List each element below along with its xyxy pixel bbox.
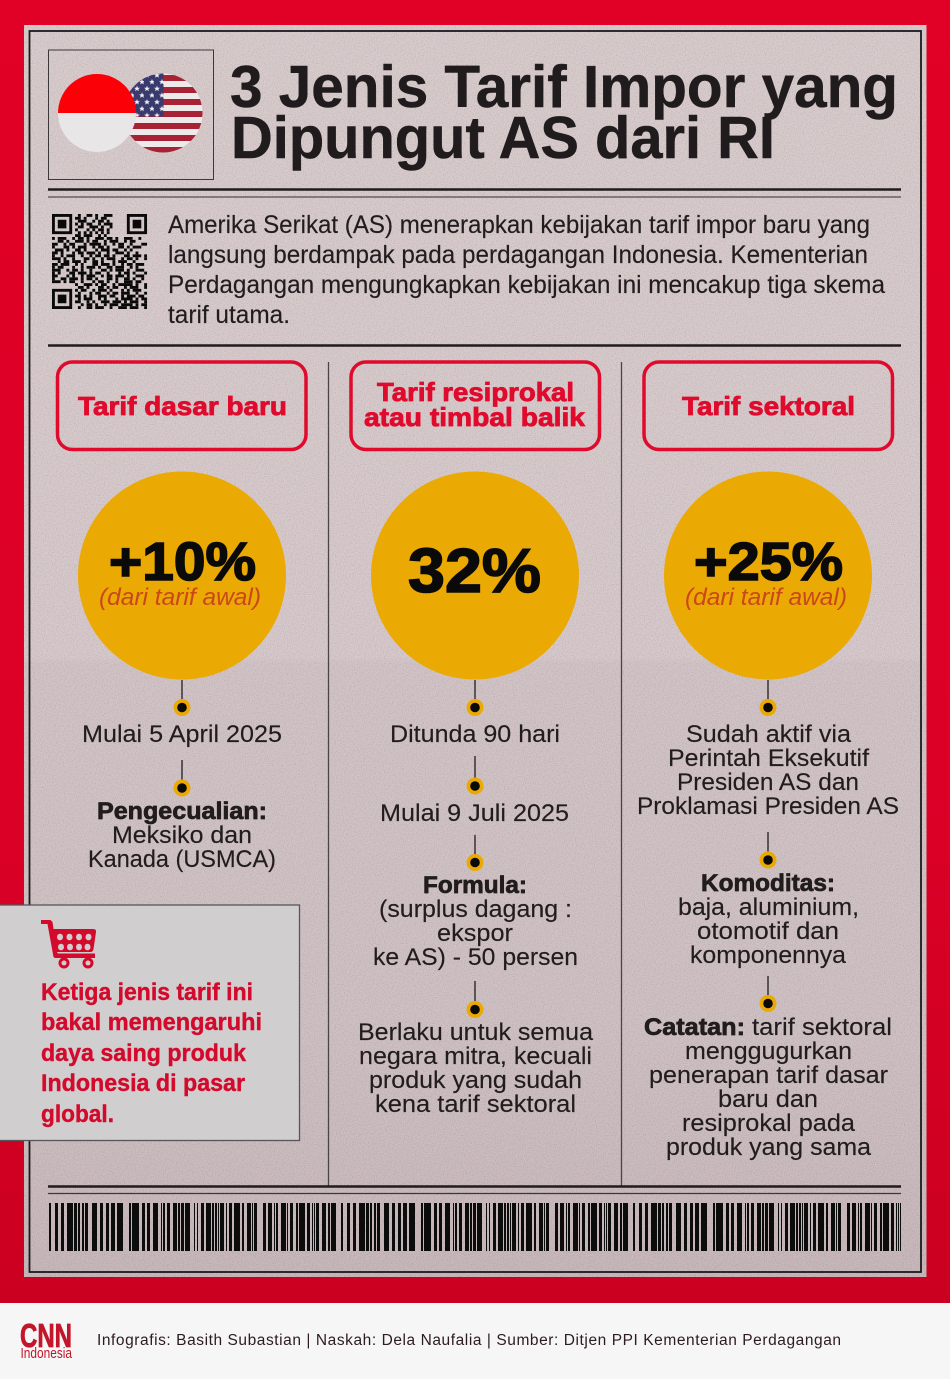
rate circle <box>78 472 286 680</box>
rate circle: (dari tarif awal) <box>685 584 847 611</box>
exceptions: Pengecualian: <box>97 798 267 825</box>
intro text: Perdagangan mengungkapkan kebijakan ini mencakup tiga skema <box>168 271 885 299</box>
exceptions: Meksiko dan <box>112 822 252 849</box>
formula <box>373 872 578 971</box>
rate circle: 32% <box>408 537 541 606</box>
scope note: produk yang sudah <box>369 1067 582 1094</box>
exceptions <box>88 798 276 873</box>
logo: CNN Indonesia: Indonesia <box>20 1346 73 1362</box>
scope note: kena tarif sektoral <box>375 1091 576 1118</box>
scope note: Berlaku untuk semua <box>358 1019 594 1046</box>
icon: Indonesia flag <box>58 74 136 152</box>
icon: US flag <box>123 73 203 153</box>
commodities: baja, aluminium, <box>678 894 859 921</box>
heading box: Tarif resiprokal <box>377 377 574 407</box>
rate circle <box>371 472 579 680</box>
icon: shopping cart <box>41 920 96 967</box>
formula: ke AS) - 50 persen <box>373 944 578 971</box>
flag box <box>48 50 214 180</box>
panel: tarif dasar baru <box>58 362 306 873</box>
heading box: Tarif dasar baru <box>78 391 287 421</box>
intro text: Amerika Serikat (AS) menerapkan kebijakan tarif impor baru yang <box>168 211 870 239</box>
exceptions: Kanada (USMCA) <box>88 846 276 873</box>
heading box: Tarif sektoral <box>682 391 855 421</box>
note: resiprokal pada <box>682 1110 856 1137</box>
intro text <box>168 211 885 329</box>
note: menggugurkan <box>685 1038 852 1065</box>
footer <box>0 1303 950 1379</box>
intro text: langsung berdampak pada perdagangan Indonesia. Kementerian <box>168 241 868 269</box>
note: Catatan: <box>644 1014 745 1041</box>
title: 3 Jenis Tarif Impor yang <box>230 54 898 120</box>
intro text: tarif utama. <box>168 301 290 329</box>
title: Dipungut AS dari RI <box>231 105 775 171</box>
heading box <box>644 362 892 450</box>
rate circle: +25% <box>694 532 843 592</box>
legal basis: Perintah Eksekutif <box>668 745 869 772</box>
connector <box>760 680 776 1012</box>
callout text: Ketiga jenis tarif ini <box>41 979 253 1006</box>
commodities: komponennya <box>690 942 847 969</box>
callout text <box>41 979 262 1128</box>
legal basis: Proklamasi Presiden AS <box>637 793 899 820</box>
legal basis: Sudah aktif via <box>686 721 852 748</box>
delay: Ditunda 90 hari <box>390 721 560 748</box>
callout text: Indonesia di pasar <box>41 1070 245 1097</box>
callout <box>0 905 300 1140</box>
formula: Formula: <box>423 872 527 899</box>
logo: CNN Indonesia <box>20 1317 73 1362</box>
start date: Mulai 9 Juli 2025 <box>380 800 569 827</box>
barcode <box>49 1203 901 1251</box>
callout text: global. <box>41 1101 114 1128</box>
scope note: negara mitra, kecuali <box>359 1043 592 1070</box>
credits: Infografis: Basith Subastian | Naskah: Dela Naufalia | Sumber: Ditjen PPI Kementerian Perdagangan <box>97 1332 841 1349</box>
rate circle: (dari tarif awal) <box>99 584 261 611</box>
panel: tarif sektoral <box>637 362 899 1161</box>
formula: (surplus dagang : <box>379 896 572 923</box>
note: tarif sektoral <box>752 1014 892 1041</box>
legal basis <box>637 721 899 820</box>
title <box>230 54 898 171</box>
QR code <box>52 215 147 308</box>
formula: ekspor <box>437 920 513 947</box>
callout text: daya saing produk <box>41 1040 247 1067</box>
scope note <box>358 1019 594 1118</box>
heading box: atau timbal balik <box>364 402 586 432</box>
note: produk yang sama <box>666 1134 872 1161</box>
logo: CNN Indonesia: CNN <box>20 1317 72 1354</box>
start date: Mulai 5 April 2025 <box>82 721 282 748</box>
commodities <box>678 870 859 969</box>
note: penerapan tarif dasar <box>649 1062 888 1089</box>
heading box <box>58 362 306 450</box>
rate circle <box>664 472 872 680</box>
note <box>644 1014 892 1161</box>
note: baru dan <box>718 1086 818 1113</box>
connector <box>174 680 190 796</box>
heading box <box>351 362 600 450</box>
commodities: otomotif dan <box>697 918 839 945</box>
rate circle: +10% <box>109 532 256 592</box>
callout text: bakal memengaruhi <box>41 1009 262 1036</box>
panel: tarif resiprokal <box>351 362 600 1118</box>
legal basis: Presiden AS dan <box>677 769 859 796</box>
connector <box>466 680 484 1018</box>
commodities: Komoditas: <box>701 870 835 897</box>
